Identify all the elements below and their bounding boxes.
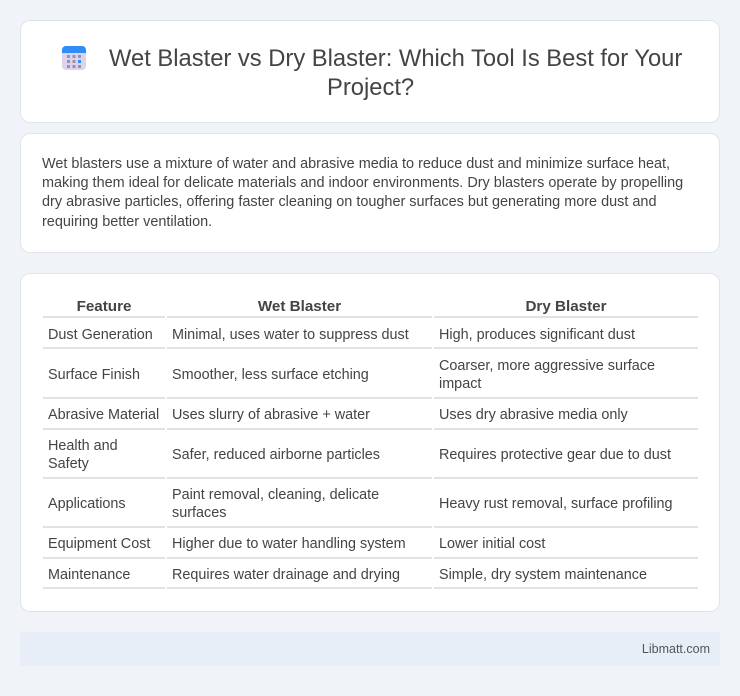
title: Project? xyxy=(327,74,414,101)
row: abrasive material xyxy=(43,407,698,430)
row: surface finish: Smoother, less surface etching xyxy=(172,367,369,383)
text block: introduction: requiring better ventilation. xyxy=(42,214,212,230)
row: health and safety: Health and xyxy=(48,438,118,454)
row: abrasive material: Uses dry abrasive media only xyxy=(439,407,628,423)
table header row xyxy=(43,298,698,318)
table header row: Dry Blaster xyxy=(525,298,607,315)
title: Wet Blaster vs Dry Blaster: Which Tool Is Best for Your xyxy=(109,45,682,72)
table header row: Feature xyxy=(77,298,131,315)
panel: title card xyxy=(20,20,720,123)
row: health and safety xyxy=(43,438,698,479)
text block: introduction xyxy=(42,156,683,230)
row: applications: Paint removal, cleaning, delicate xyxy=(172,487,379,503)
row: equipment cost xyxy=(43,536,698,559)
row: surface finish: impact xyxy=(439,376,481,392)
row: health and safety: Safety xyxy=(48,456,89,472)
row: health and safety: Safer, reduced airborne particles xyxy=(172,447,380,463)
text block: introduction: making them ideal for delicate materials and indoor environments. Dry blasters operate by propelling xyxy=(42,175,683,191)
title xyxy=(109,45,682,101)
row: dust generation xyxy=(43,327,698,349)
row: abrasive material: Abrasive Material xyxy=(48,407,159,423)
row: equipment cost: Equipment Cost xyxy=(48,536,150,552)
row: dust generation: Minimal, uses water to suppress dust xyxy=(172,327,409,343)
row: applications: Heavy rust removal, surface profiling xyxy=(439,496,673,512)
row: applications: Applications xyxy=(48,496,126,512)
row: health and safety: Requires protective gear due to dust xyxy=(439,447,671,463)
table header row: Wet Blaster xyxy=(258,298,341,315)
row: equipment cost: Lower initial cost xyxy=(439,536,545,552)
panel: comparison table xyxy=(20,273,720,612)
row: maintenance: Requires water drainage and drying xyxy=(172,567,400,583)
icon: calendar xyxy=(62,46,86,70)
text block: introduction: Wet blasters use a mixture of water and abrasive media to reduce dust and minimize surface heat, xyxy=(42,156,670,172)
row: maintenance: Simple, dry system maintenance xyxy=(439,567,647,583)
footer credit: Libmatt.com xyxy=(642,642,710,656)
row: surface finish xyxy=(43,358,698,399)
row: maintenance: Maintenance xyxy=(48,567,130,583)
row: abrasive material: Uses slurry of abrasive + water xyxy=(172,407,370,423)
row: dust generation: Dust Generation xyxy=(48,327,153,343)
row: applications: surfaces xyxy=(172,505,226,521)
row: surface finish: Surface Finish xyxy=(48,367,140,383)
text block: introduction: dry abrasive particles, offering faster cleaning on tougher surfaces but generating more dust and xyxy=(42,194,656,210)
row: dust generation: High, produces significant dust xyxy=(439,327,635,343)
row: equipment cost: Higher due to water handling system xyxy=(172,536,406,552)
footer bar xyxy=(20,632,720,666)
panel: introduction xyxy=(20,133,720,253)
row: applications xyxy=(43,487,698,528)
row: maintenance xyxy=(43,567,698,589)
row: surface finish: Coarser, more aggressive surface xyxy=(439,358,655,374)
